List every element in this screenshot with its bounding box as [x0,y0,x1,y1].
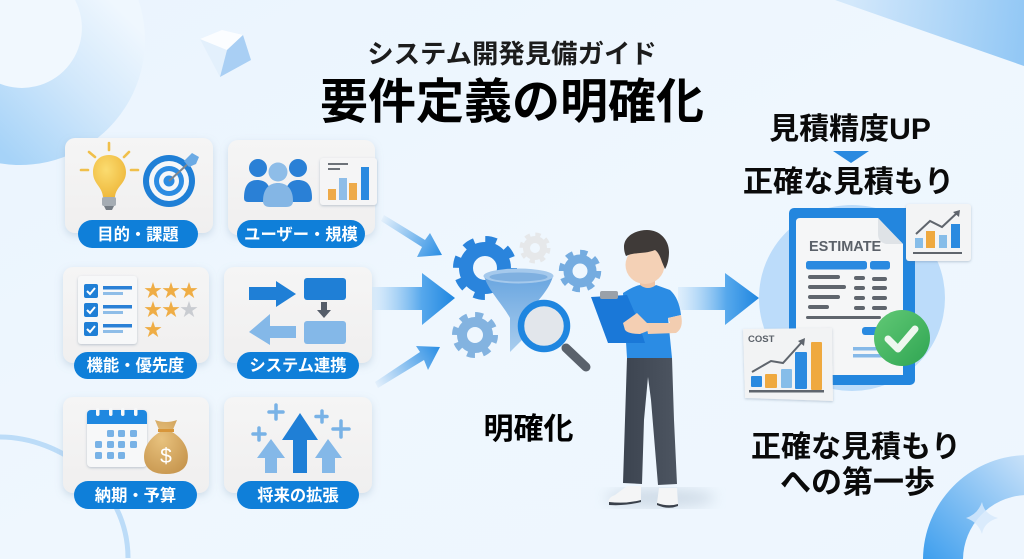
paper [796,218,903,375]
icon: star ratings: ★ [162,300,180,320]
icon: large gear [457,240,513,296]
decorative crystal [200,30,251,77]
main heading: 要件定義の明確化 [320,76,704,129]
estimate label: ESTIMATE [809,239,882,255]
icon: light bulb [81,143,138,210]
icon: star ratings: ★ [144,300,162,320]
document back [789,208,915,385]
subtitle: システム開発見備ガイド [367,39,657,69]
heading: clarification: 明確化 [484,413,574,446]
table [806,261,890,358]
shadow [605,489,715,507]
panel: users and scale [228,140,377,248]
icon: star ratings: ★ [162,281,180,301]
icon: growth arrows [253,405,349,473]
heading: estimate accuracy up: 見積精度UP [769,113,931,146]
icon: gears and funnel [455,235,598,367]
panel: features and priority [63,267,209,379]
label pill: 機能・優先度 [87,356,184,375]
closing message [751,431,961,500]
illustration: person with clipboard [591,230,715,508]
icon: target [143,153,199,207]
panel: purpose and issues [65,138,213,248]
card: growth chart [906,204,971,261]
clipboard [591,291,645,343]
label pill [237,220,365,248]
title [320,39,704,129]
icon: light gear left [455,315,495,355]
icon: users [244,159,312,207]
icon: mini bar chart [320,158,377,205]
card: cost chart [743,328,833,401]
icon: star ratings: ★ [144,281,162,301]
icon: calendar [87,408,147,467]
arrow: down triangle [833,151,869,163]
icon: star ratings: ★ [144,320,162,340]
arrow: to estimate [678,273,759,325]
neck [640,276,655,290]
panel: schedule and budget [63,397,209,509]
card: cost chart: COST [748,334,775,345]
label pill: ユーザー・規模 [244,226,358,244]
label pill: システム連携 [249,356,347,375]
label pill [74,352,197,379]
icon: money bag: $ [160,445,172,468]
closing message: 正確な見積もり [751,431,961,464]
closing message: への第一歩 [780,465,935,500]
icon: checklist [78,276,137,344]
heading: accurate estimate: 正確な見積もり [743,165,954,199]
label pill: 目的・課題 [97,226,179,244]
arrow: top input [381,215,442,257]
shoes [609,486,678,508]
icon: grey gear [522,235,548,261]
icon: light gear right [562,252,598,290]
backdrop circle [759,205,945,391]
icon: magnifier [521,303,586,367]
icon: star ratings [144,281,198,340]
hair [624,230,669,269]
label pill [237,352,359,379]
hand [623,313,650,334]
shirt [623,285,681,358]
illustration: estimate document [743,204,971,401]
label pill [74,481,197,509]
arrow: bottom input [375,346,440,388]
arm [646,315,682,334]
panel: future expansion [224,397,372,509]
icon: green check [874,310,930,366]
icon: money bag [144,420,188,474]
head [626,246,664,284]
label pill [78,220,198,248]
label pill: 将来の拡張 [257,487,339,505]
trousers [623,358,677,485]
label pill: 納期・予算 [95,486,176,505]
icon: funnel [484,268,554,352]
label pill [237,481,359,509]
arrow: middle input [372,273,455,325]
icon: star ratings: ★ [180,281,198,301]
icon: flow arrows and boxes [249,278,346,345]
panel: system integration [224,267,372,379]
icon: star ratings: ★ [180,300,198,320]
